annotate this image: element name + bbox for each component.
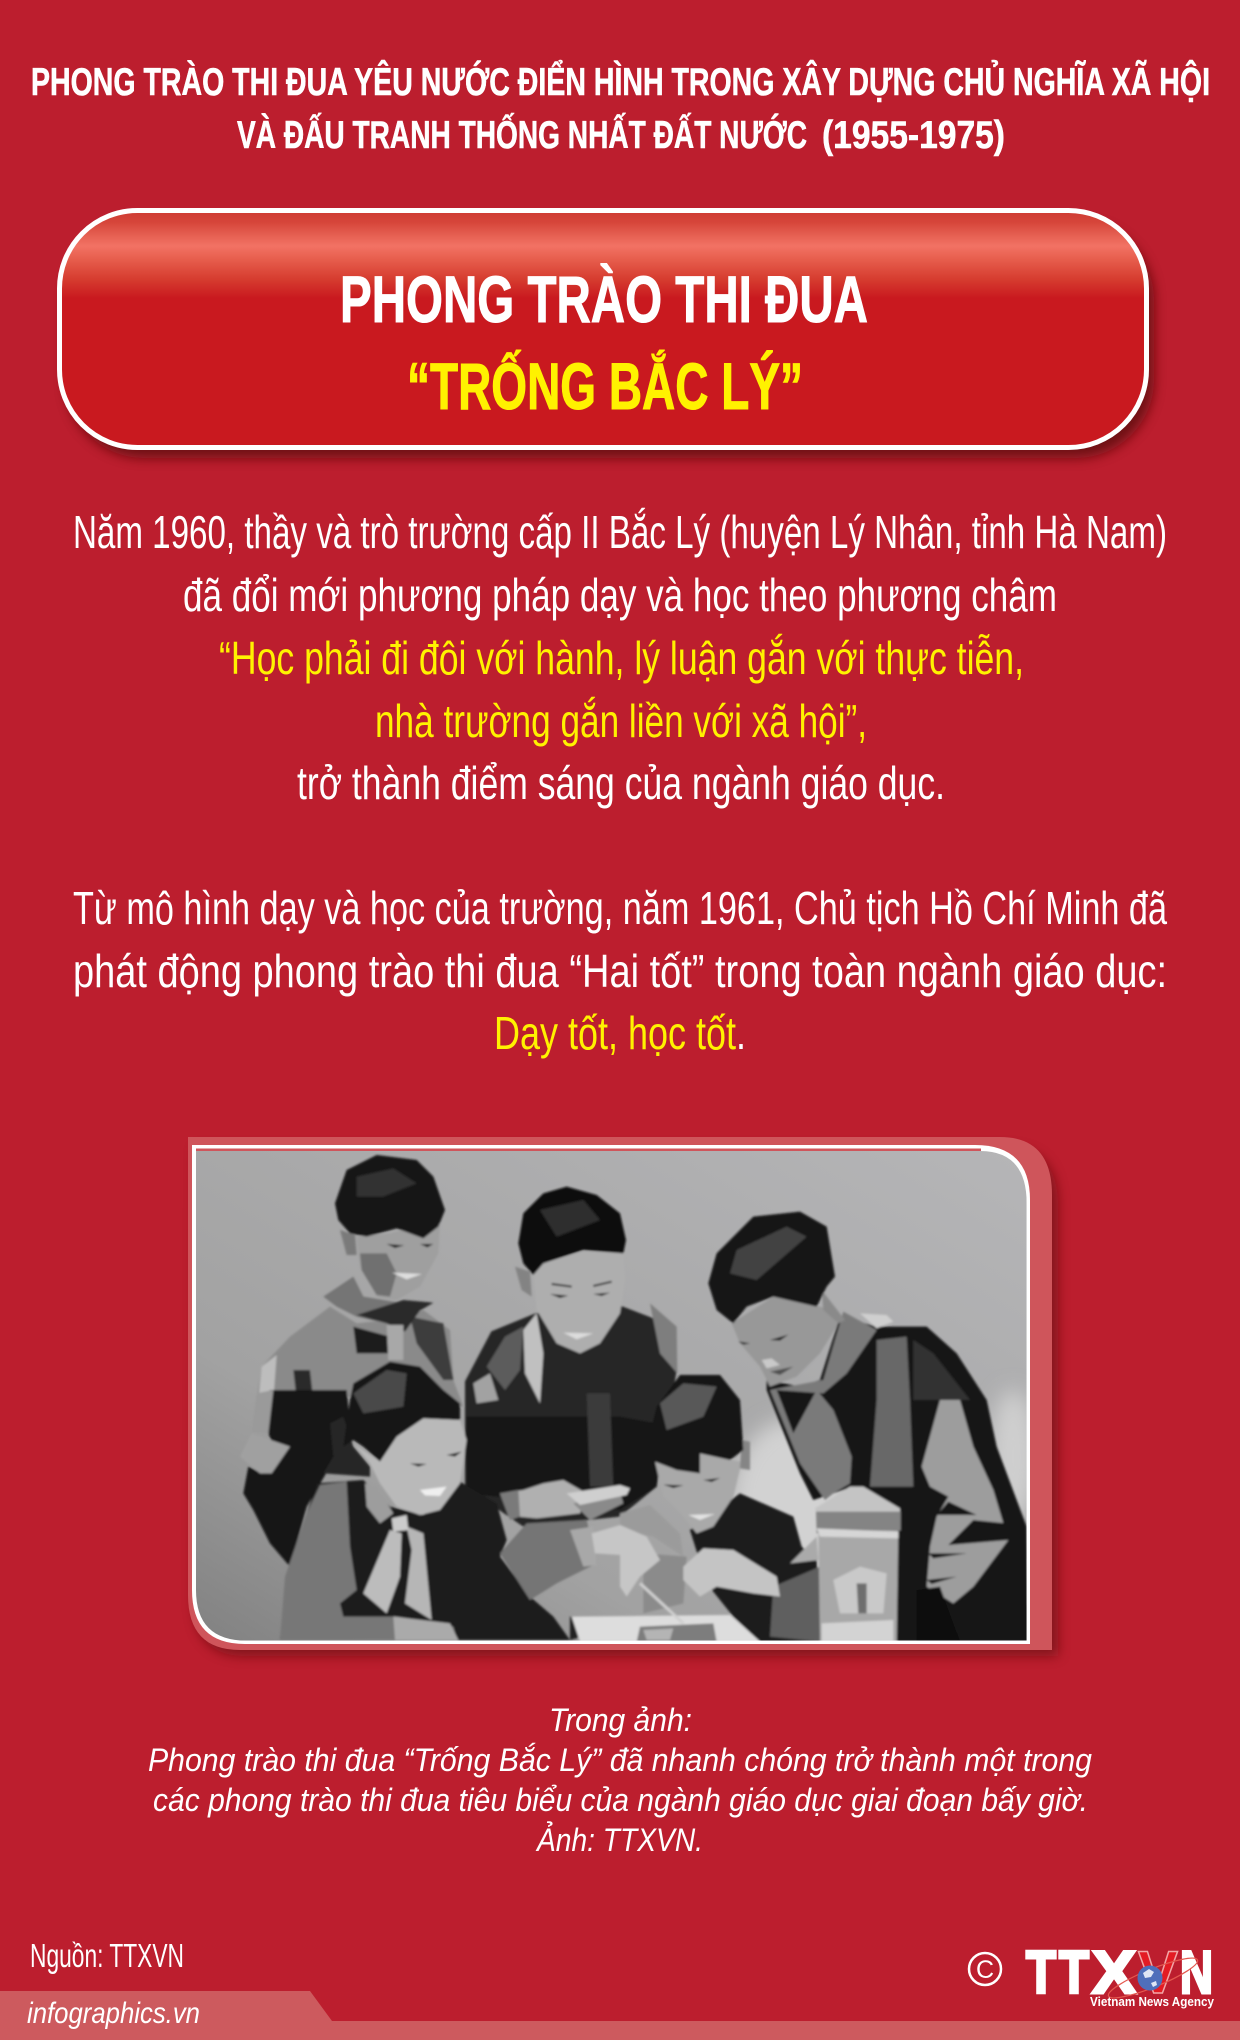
logo: TTXVN	[1026, 1939, 1215, 2009]
footer band: infographics.vn	[27, 1997, 200, 2030]
text block: second paragraph	[73, 882, 1167, 1059]
text block: second paragraph: Dạy tốt, học tốt.	[494, 1007, 746, 1059]
logo: TTXVN: Vietnam News Agency	[1090, 1994, 1215, 2009]
title: (1955-1975)	[822, 114, 1005, 157]
front boy shirt and torso	[620, 1493, 820, 1642]
logo: TTXVN: T	[1026, 1939, 1056, 2006]
footer band	[0, 1991, 1240, 2040]
photo caption: Phong trào thi đua “Trống Bắc Lý” đã nhanh chóng trở thành một trong	[148, 1742, 1092, 1778]
photo caption	[148, 1702, 1092, 1858]
photo: students around a tray and a specimen jar	[190, 1140, 1050, 1650]
banner: movement name: PHONG TRÀO THI ĐUA	[340, 262, 868, 336]
logo: TTXVN: V	[1138, 1939, 1178, 2006]
copyright symbol: C	[976, 1956, 994, 1984]
banner: movement name: “TRỐNG BẮC LÝ”	[407, 349, 803, 423]
arms and hands	[500, 1480, 780, 1640]
tray	[572, 1583, 760, 1642]
copyright symbol	[969, 1953, 1001, 1985]
logo: TTXVN: X	[1092, 1939, 1136, 2006]
right boy	[708, 1212, 1028, 1642]
photo caption: Ảnh: TTXVN.	[535, 1822, 703, 1858]
front boy head	[653, 1373, 752, 1535]
title	[31, 59, 1210, 157]
back-left boy	[240, 1155, 463, 1567]
logo: TTXVN: T	[1059, 1939, 1089, 2006]
logo: TTXVN: N	[1180, 1939, 1213, 2006]
banner: movement name	[60, 210, 1154, 458]
source note: Nguồn: TTXVN	[30, 1937, 184, 1974]
photo panel	[188, 1137, 1058, 1656]
photo caption: Trong ảnh:	[549, 1702, 692, 1738]
centre boy	[465, 1187, 677, 1527]
text block: first paragraph	[73, 506, 1167, 809]
girl	[280, 1362, 570, 1640]
photo caption: các phong trào thi đua tiêu biểu của ngành giáo dục giai đoạn bấy giờ.	[153, 1782, 1088, 1818]
text block: first paragraph: “Học phải đi đôi với hành, lý luận gắn với thực tiễn,	[219, 632, 1024, 684]
text block: first paragraph: trở thành điểm sáng của ngành giáo dục.	[297, 757, 945, 809]
text block: first paragraph: nhà trường gắn liền với xã hội”,	[375, 695, 867, 747]
title: VÀ ĐẤU TRANH THỐNG NHẤT ĐẤT NƯỚC	[237, 112, 807, 157]
jar	[815, 1487, 901, 1642]
